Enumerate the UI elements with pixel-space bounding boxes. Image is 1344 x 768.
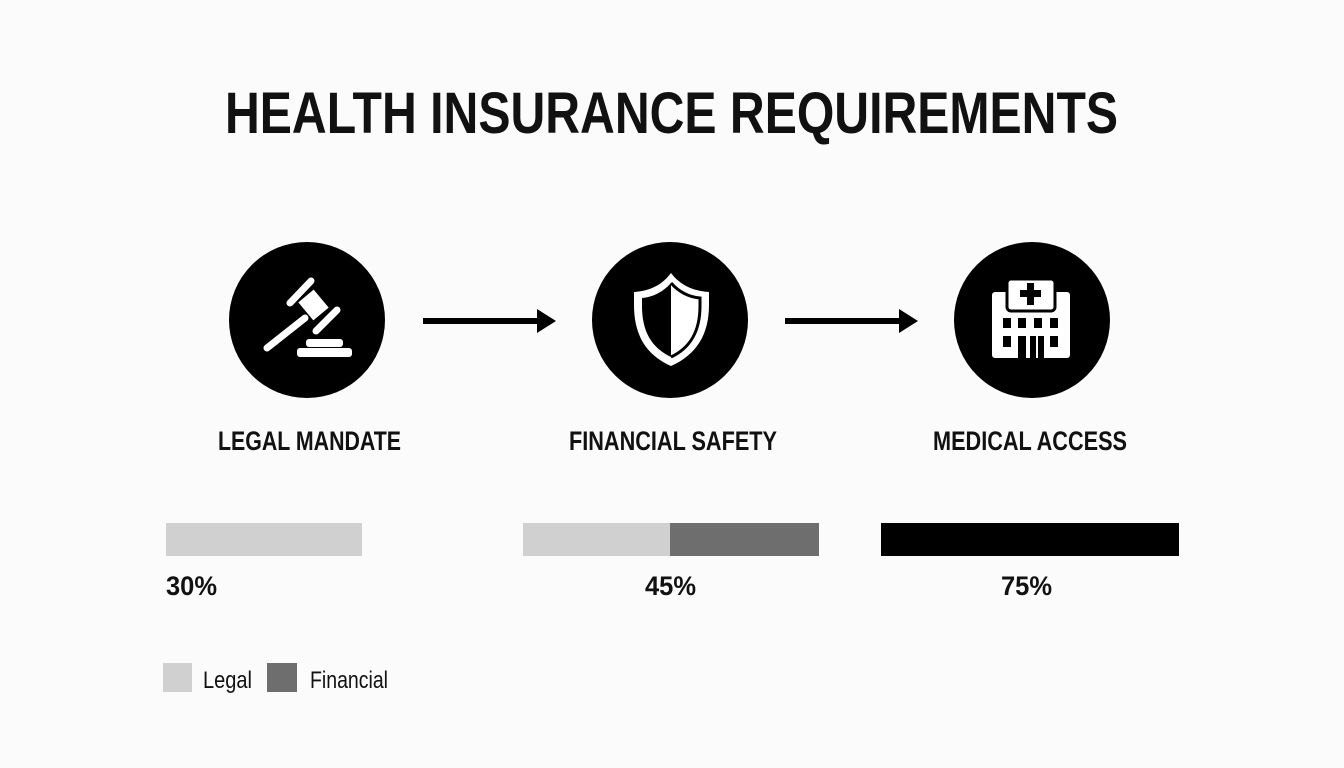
title: HEALTH INSURANCE REQUIREMENTS — [225, 81, 1118, 146]
label: financial safety: FINANCIAL SAFETY — [569, 426, 777, 456]
bar: medical 75% — [881, 523, 1179, 556]
icon: shield — [592, 242, 748, 398]
value 30%: 30% — [166, 571, 217, 601]
bar: legal 30% — [166, 523, 362, 556]
legend — [163, 663, 388, 694]
arrow 1 — [423, 309, 556, 333]
legend: Financial — [310, 667, 388, 694]
value 75%: 75% — [1001, 571, 1052, 601]
legend: Legal — [203, 667, 252, 694]
icon: gavel — [229, 242, 385, 398]
arrow 2 — [785, 309, 918, 333]
label: legal mandate: LEGAL MANDATE — [218, 426, 401, 456]
bar: financial 45% — [523, 523, 819, 556]
label: medical access: MEDICAL ACCESS — [933, 426, 1127, 456]
icon: hospital — [954, 242, 1110, 398]
value 45%: 45% — [645, 571, 696, 601]
